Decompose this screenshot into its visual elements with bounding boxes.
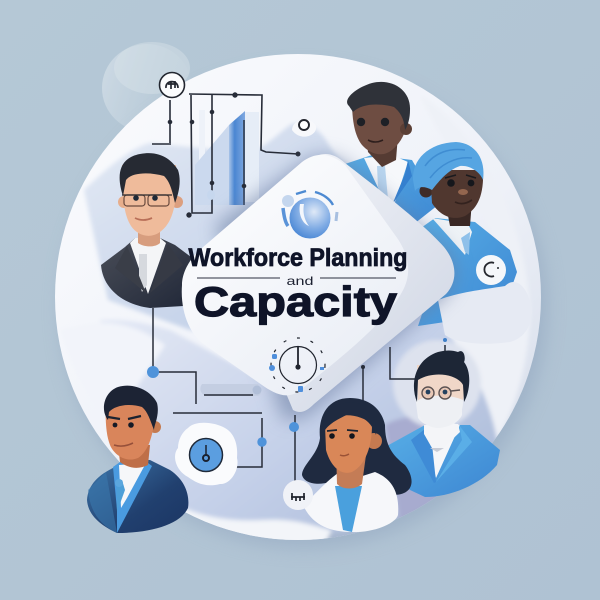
- connector lines: top circuit: [152, 93, 300, 217]
- person: turban man: [413, 142, 517, 326]
- pale pillars behind circuit: [195, 110, 259, 205]
- lower right blue-grey disc edge: [325, 531, 358, 538]
- person: doctor with glasses and beard: [385, 350, 500, 497]
- person: top right man: [340, 82, 438, 235]
- person: top left man: [101, 153, 200, 308]
- infographic canvas: [55, 42, 549, 550]
- icon: badge on turban man: [476, 255, 506, 285]
- icon: gear gauge: [175, 423, 238, 485]
- title: Workforce Planning: [188, 244, 408, 272]
- lower blue swoop: [104, 314, 498, 534]
- lavender swirl: [385, 416, 437, 518]
- icon: top badge: [160, 72, 184, 98]
- upper blue landscape: [84, 122, 346, 332]
- translucent back circle: [102, 42, 192, 132]
- icon: clock gauge: [269, 338, 325, 392]
- layer group: [84, 122, 528, 540]
- main disc: [55, 54, 547, 548]
- textured white panel: [102, 324, 164, 388]
- bottom white band: [186, 508, 333, 540]
- center card: back layer: [215, 154, 456, 420]
- title rule right: [320, 277, 396, 279]
- right side white band: [448, 272, 528, 438]
- title: and: [286, 274, 314, 288]
- pale halo behind doctor: [393, 340, 481, 428]
- chip: small bar: [200, 384, 262, 396]
- center card: front face: [182, 155, 408, 395]
- person: bottom left man: [87, 386, 188, 533]
- title rule left: [197, 277, 280, 279]
- tall blue bar: [229, 111, 245, 205]
- title: Capacity: [194, 278, 398, 325]
- disc inner layers: [84, 122, 528, 540]
- cloud panel right: [438, 282, 532, 344]
- title: [188, 244, 408, 325]
- person: woman in white coat: [302, 398, 412, 532]
- icon: ring badge: [292, 120, 316, 137]
- node: pale blue connector: [207, 190, 215, 200]
- icon: bottom badge: [283, 480, 313, 510]
- icon: orb dial: [282, 191, 337, 238]
- connector nodes: [147, 338, 447, 447]
- connector lines: lower circuit: [153, 308, 445, 482]
